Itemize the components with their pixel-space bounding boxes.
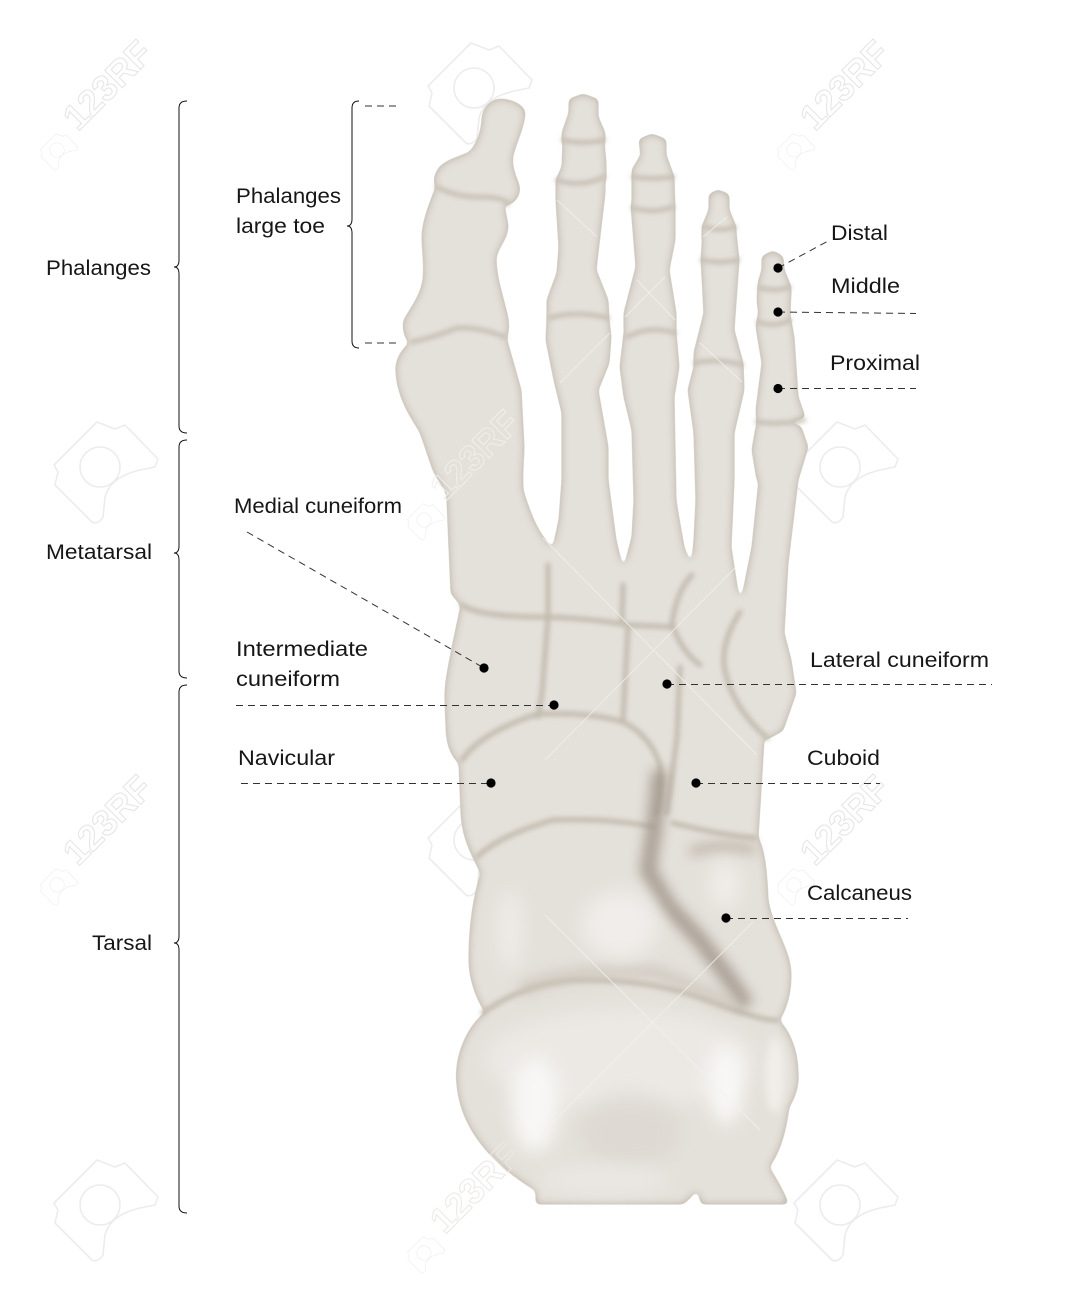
bone: ankle and tibia — [457, 975, 797, 1203]
bone: big toe distal phalanx — [435, 100, 524, 204]
bone: second toe proximal phalanx — [548, 180, 608, 320]
bone: big toe proximal phalanx — [404, 187, 508, 345]
watermarks: 123RF — [792, 32, 897, 138]
label: Tarsal: Tarsal — [92, 932, 152, 955]
pointer: Calcaneus — [721, 913, 908, 923]
bone: first metatarsal — [397, 337, 553, 617]
pointer: Proximal — [773, 384, 916, 393]
bone: fifth metatarsal — [723, 422, 807, 738]
bone: fourth metatarsal — [673, 358, 743, 665]
bone: third toe proximal phalanx — [625, 205, 675, 333]
bracket: phalanges — [174, 101, 187, 433]
watermark cross lines on bones — [540, 200, 760, 1135]
bracket: tarsal — [174, 685, 187, 1213]
pointer: Medial cuneiform — [247, 532, 489, 673]
label: Phalanges: Phalanges — [46, 257, 151, 280]
foot silhouette — [397, 95, 807, 1203]
midfoot backing — [446, 552, 790, 1022]
bracket: phalanges large toe — [347, 101, 359, 348]
label: Calcaneus: Calcaneus — [807, 882, 912, 905]
label: Cuboid: Cuboid — [807, 747, 880, 770]
bone: fourth toe proximal phalanx — [695, 258, 742, 367]
watermarks: 123RF — [55, 767, 160, 873]
bone: second toe distal phalanx — [563, 95, 604, 145]
bone: fifth toe distal phalanx — [759, 252, 790, 296]
label: Proximal: Proximal — [830, 352, 920, 375]
label: Medial cuneiform: Medial cuneiform — [234, 495, 402, 518]
pointer: Navicular — [241, 778, 496, 788]
label: Distal: Distal — [831, 222, 888, 245]
label: Metatarsal: Metatarsal — [46, 541, 152, 564]
bone: second metatarsal — [547, 314, 623, 622]
joint seams — [412, 140, 804, 1020]
label: Phalanges large toe: Phalanges — [236, 185, 341, 208]
watermark text over foot, lower: 123RF — [422, 1135, 527, 1241]
leader: large toe bottom — [365, 342, 396, 344]
label: Middle: Middle — [831, 275, 900, 298]
watermark text over foot, upper: 123RF — [422, 402, 527, 508]
bone: second toe middle phalanx — [557, 142, 605, 187]
pointer: Distal — [773, 240, 830, 273]
pointer: Intermediate cuneiform — [236, 700, 559, 710]
pointer: Cuboid — [691, 778, 880, 788]
bone: third toe middle phalanx — [633, 178, 674, 210]
bone: third toe distal phalanx — [633, 135, 673, 180]
bone: fifth toe proximal phalanx — [757, 310, 804, 427]
pointer: Middle — [773, 307, 916, 317]
tarsal shadows and highlights — [485, 770, 785, 1194]
bone: third metatarsal — [621, 327, 692, 633]
label: Phalanges large toe: large toe — [236, 215, 325, 238]
bone: fourth toe distal phalanx — [703, 191, 735, 240]
label: Intermediate cuneiform: Intermediate — [236, 638, 368, 661]
label: Intermediate cuneiform: cuneiform — [236, 668, 340, 691]
pointer: Lateral cuneiform — [662, 679, 992, 689]
bracket: metatarsal — [174, 440, 187, 678]
bone: fourth toe middle phalanx — [702, 232, 738, 264]
bone: fifth toe middle phalanx — [758, 285, 790, 320]
watermarks — [40, 32, 898, 1273]
watermarks: 123RF — [792, 767, 897, 873]
foot skeleton illustration — [397, 95, 807, 1241]
label: Navicular: Navicular — [238, 747, 335, 770]
label: Lateral cuneiform: Lateral cuneiform — [810, 649, 989, 672]
watermarks: 123RF — [55, 32, 160, 138]
leader: large toe top — [365, 105, 396, 107]
